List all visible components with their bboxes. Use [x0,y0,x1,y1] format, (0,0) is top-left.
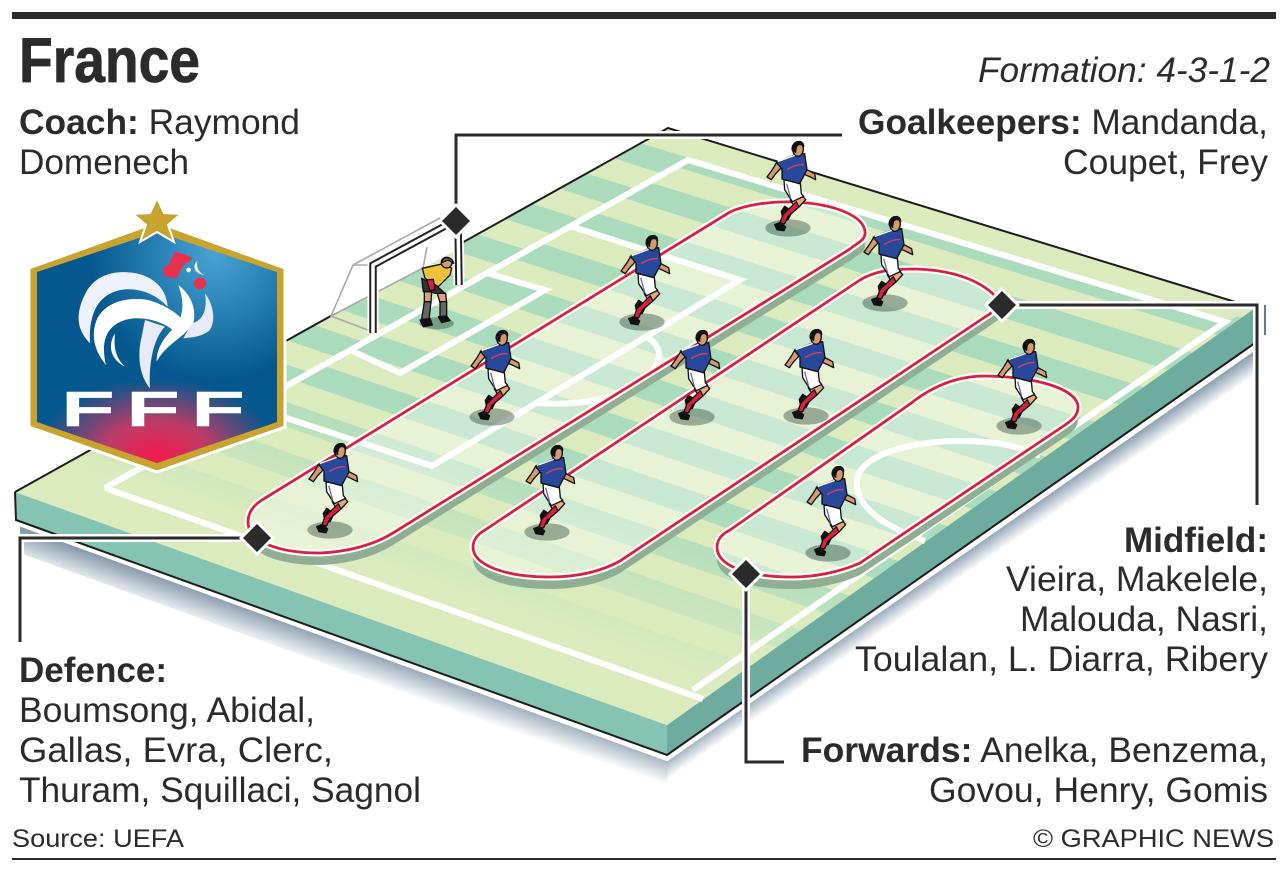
coach text: Coach: Raymond [19,103,300,142]
defence text: Gallas, Evra, Clerc, [19,731,333,770]
leader: forwards [728,556,784,762]
player: forward right [996,340,1047,435]
goalkeepers text: Coupet, Frey [1063,143,1269,182]
player: centre midfielder [669,331,720,426]
defence text: Thuram, Squillaci, Sagnol [19,771,421,810]
forwards text: Forwards: Anelka, Benzema, [801,731,1268,770]
goalkeepers text [858,103,1269,182]
player: forward left [805,467,856,562]
defence text: Defence: [19,651,167,690]
goalkeeper [419,257,454,329]
player: lower midfielder [524,446,575,541]
left slab side [15,492,667,755]
player: second midfielder [783,330,834,425]
credit: © GRAPHIC NEWS [1033,825,1274,853]
leader: defence [20,520,275,642]
forwards text [801,731,1268,810]
leader: goalkeepers [438,135,842,239]
coach text: Domenech [19,143,189,182]
pill: defence and forwards track 1 [244,198,868,565]
goalkeepers text: Goalkeepers: Mandanda, [858,103,1268,142]
defence text [19,651,421,810]
leader: midfield [984,287,1257,505]
top rule [12,12,1276,19]
midfield text: Toulalan, L. Diarra, Ribery [855,640,1269,679]
defence text: Boumsong, Abidal, [19,691,315,730]
crest shield [29,222,285,472]
player: centre back [469,331,520,426]
icon: FFF crest [30,200,286,474]
pitch surface [15,128,1255,725]
midfield text: Midfield: [1124,521,1268,560]
title: France [19,26,200,96]
pill: midfield track 2 [470,266,998,589]
coach text [19,103,300,182]
crest blue field [37,232,277,463]
formation label: Formation: 4-3-1-2 [978,51,1270,90]
icon: goal net and frame [331,218,460,333]
crest letters: FFF [62,384,243,435]
midfield text: Malouda, Nasri, [1020,600,1268,639]
player: attacking midfielder [862,217,913,312]
midfield text: Vieira, Makelele, [1006,560,1268,599]
pill: forwards track 3 [714,372,1082,589]
right corner sliver [1264,305,1266,335]
pitch drop shadow right [667,348,1256,788]
icon: rooster [79,252,213,388]
player: top midfielder [765,142,816,237]
midfield text [855,521,1269,679]
slab base halo [16,346,1258,759]
crest red glow [46,380,268,463]
pitch drop shadow left [20,526,667,788]
player: left defender [307,444,358,539]
slab outline [15,343,1255,755]
player: goal side defender [619,236,670,331]
right slab side [667,308,1255,755]
far edge outline [15,128,1255,492]
forwards text: Govou, Henry, Gomis [929,771,1268,810]
source: Source: UEFA [12,825,184,853]
bottom rule [12,858,1276,860]
icon: gold star [133,198,181,242]
pitch slab [15,128,1265,788]
